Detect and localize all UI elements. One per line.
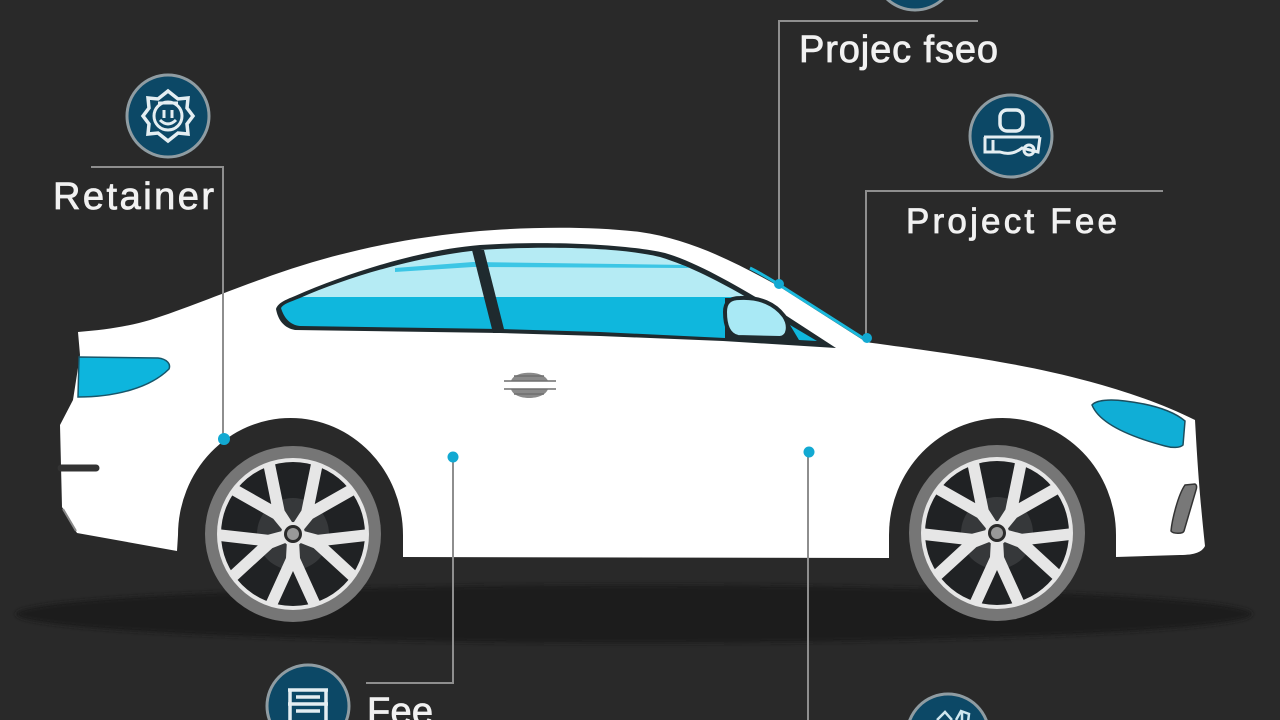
inner shade [961, 497, 1033, 569]
rear wheel [205, 446, 381, 622]
windshield edge [750, 268, 866, 340]
rim [217, 458, 369, 610]
fee icon [267, 665, 349, 720]
hub [281, 522, 305, 546]
handle bars [504, 376, 556, 394]
window stripe [395, 262, 690, 272]
bottom icon [907, 694, 989, 720]
car [60, 228, 1205, 558]
callout: project fseo [774, 0, 998, 289]
callout: bottom right [804, 446, 989, 720]
callout: fee [267, 452, 458, 720]
hub [985, 521, 1009, 545]
glass lower band [281, 297, 732, 338]
bottom dot [804, 446, 814, 458]
fee leader line [366, 457, 453, 683]
retainer label: Retainer [53, 176, 214, 218]
project fee icon [970, 95, 1052, 177]
inner shade [257, 498, 329, 570]
tyre [909, 445, 1085, 621]
retainer dot [218, 433, 230, 445]
front wheel [909, 445, 1085, 621]
top icon [874, 0, 956, 10]
project fee leader line [866, 191, 1163, 338]
side mirror [725, 298, 788, 338]
head light [1092, 400, 1185, 447]
retainer icon [127, 75, 209, 157]
handle bottom [511, 389, 548, 398]
fog light [1171, 484, 1197, 533]
fee dot [448, 452, 458, 462]
window frame [276, 243, 836, 348]
top label: Projec fseo [799, 29, 998, 71]
side windows [270, 240, 836, 348]
callout: retainer [53, 75, 230, 445]
rear vent [61, 464, 96, 472]
tyre [205, 446, 381, 622]
glass upper band [302, 248, 744, 297]
callout: project fee [862, 95, 1163, 343]
rear notch [63, 509, 76, 531]
door pillar [472, 250, 505, 333]
window glass [281, 248, 744, 338]
project fee label: Project Fee [906, 202, 1117, 241]
rim interior [925, 461, 1069, 605]
tail light [78, 357, 170, 397]
spokes [216, 460, 370, 606]
car body [60, 228, 1205, 558]
ground shadow [16, 585, 1252, 643]
bottom leader line [807, 452, 809, 720]
spokes [920, 459, 1074, 605]
handle top [511, 373, 548, 381]
project fee dot [862, 333, 872, 343]
top leader line [779, 21, 978, 284]
retainer leader line [91, 167, 223, 440]
top dot [774, 279, 784, 289]
door handle [504, 373, 556, 398]
rim [921, 457, 1073, 609]
rim interior [221, 462, 365, 606]
quarter glass [790, 325, 817, 341]
